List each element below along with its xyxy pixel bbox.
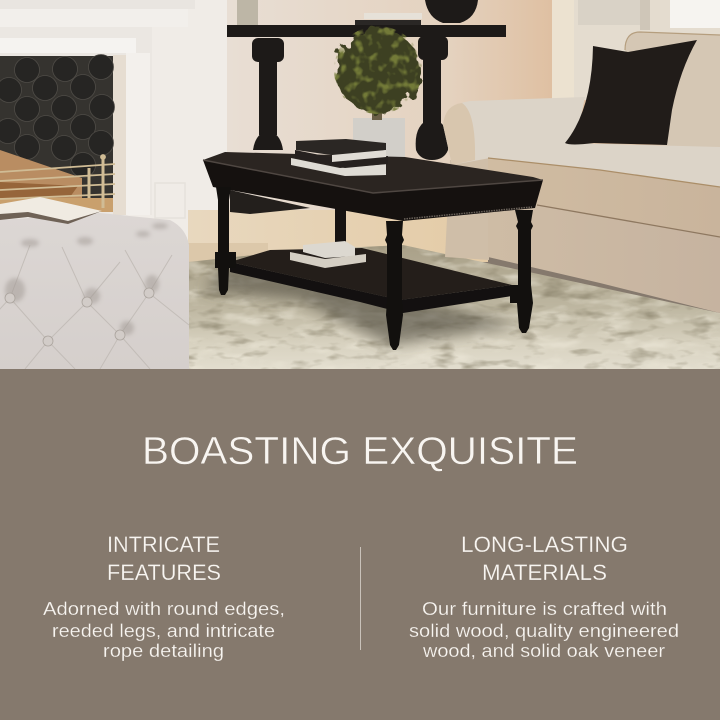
description: intricate features: rope detailing [103, 641, 224, 661]
table shadow on rug [205, 265, 520, 345]
leg front centre [385, 221, 404, 350]
back wall [226, 0, 720, 240]
text block: intricate features [43, 532, 285, 661]
fireplace tile back [0, 54, 114, 211]
arm [443, 97, 585, 165]
arm skirt [445, 156, 490, 260]
books on console [355, 13, 422, 25]
subheading: intricate features [107, 532, 221, 585]
leg left [215, 187, 236, 295]
floor wood [188, 210, 488, 262]
under-drawer [230, 190, 310, 214]
subheading: long-lasting materials [461, 532, 628, 585]
books on table top [291, 139, 388, 176]
white fireplace wall [0, 0, 227, 245]
bottom shelf [230, 248, 512, 300]
apron [203, 160, 543, 221]
tufted ottoman [0, 213, 189, 369]
console table [227, 0, 506, 160]
subheading: intricate features: INTRICATE [107, 532, 220, 557]
plant pot [353, 118, 405, 164]
fireplace mantel [0, 0, 195, 218]
fire logs [0, 150, 113, 212]
open book [0, 197, 102, 224]
back cushion [625, 32, 720, 150]
plant [334, 26, 422, 120]
description: intricate features [43, 599, 285, 661]
door frame and window [552, 0, 720, 100]
panel: text background [0, 369, 720, 720]
seat front [488, 158, 720, 237]
sofa [443, 32, 720, 313]
back legs [335, 208, 346, 243]
leg right [510, 210, 533, 333]
black pillow [565, 40, 697, 145]
subheading: long-lasting materials: MATERIALS [482, 560, 607, 585]
description: long-lasting materials [409, 599, 679, 661]
panel: room photo [0, 0, 720, 369]
rope detail [404, 207, 532, 219]
books on shelf [290, 241, 366, 268]
vase on console [237, 0, 258, 25]
description: long-lasting materials: solid wood, quality engineered [409, 621, 679, 641]
coffee table [203, 152, 543, 350]
skirt [488, 200, 720, 313]
rug pattern [188, 240, 720, 369]
description: long-lasting materials: wood, and solid oak veneer [422, 641, 665, 661]
seat cushion top [488, 143, 720, 187]
rug [188, 245, 720, 369]
description: intricate features: Adorned with round edges, [43, 599, 285, 619]
top surface [203, 152, 543, 193]
brass fire guard [0, 155, 115, 208]
subheading: long-lasting materials: LONG-LASTING [461, 532, 628, 557]
heading: BOASTING EXQUISITE [142, 430, 578, 473]
subheading: intricate features: FEATURES [107, 560, 221, 585]
description: intricate features: reeded legs, and intricate [52, 621, 275, 641]
description: long-lasting materials: Our furniture is crafted with [422, 599, 667, 619]
text block: long-lasting materials [409, 532, 679, 661]
